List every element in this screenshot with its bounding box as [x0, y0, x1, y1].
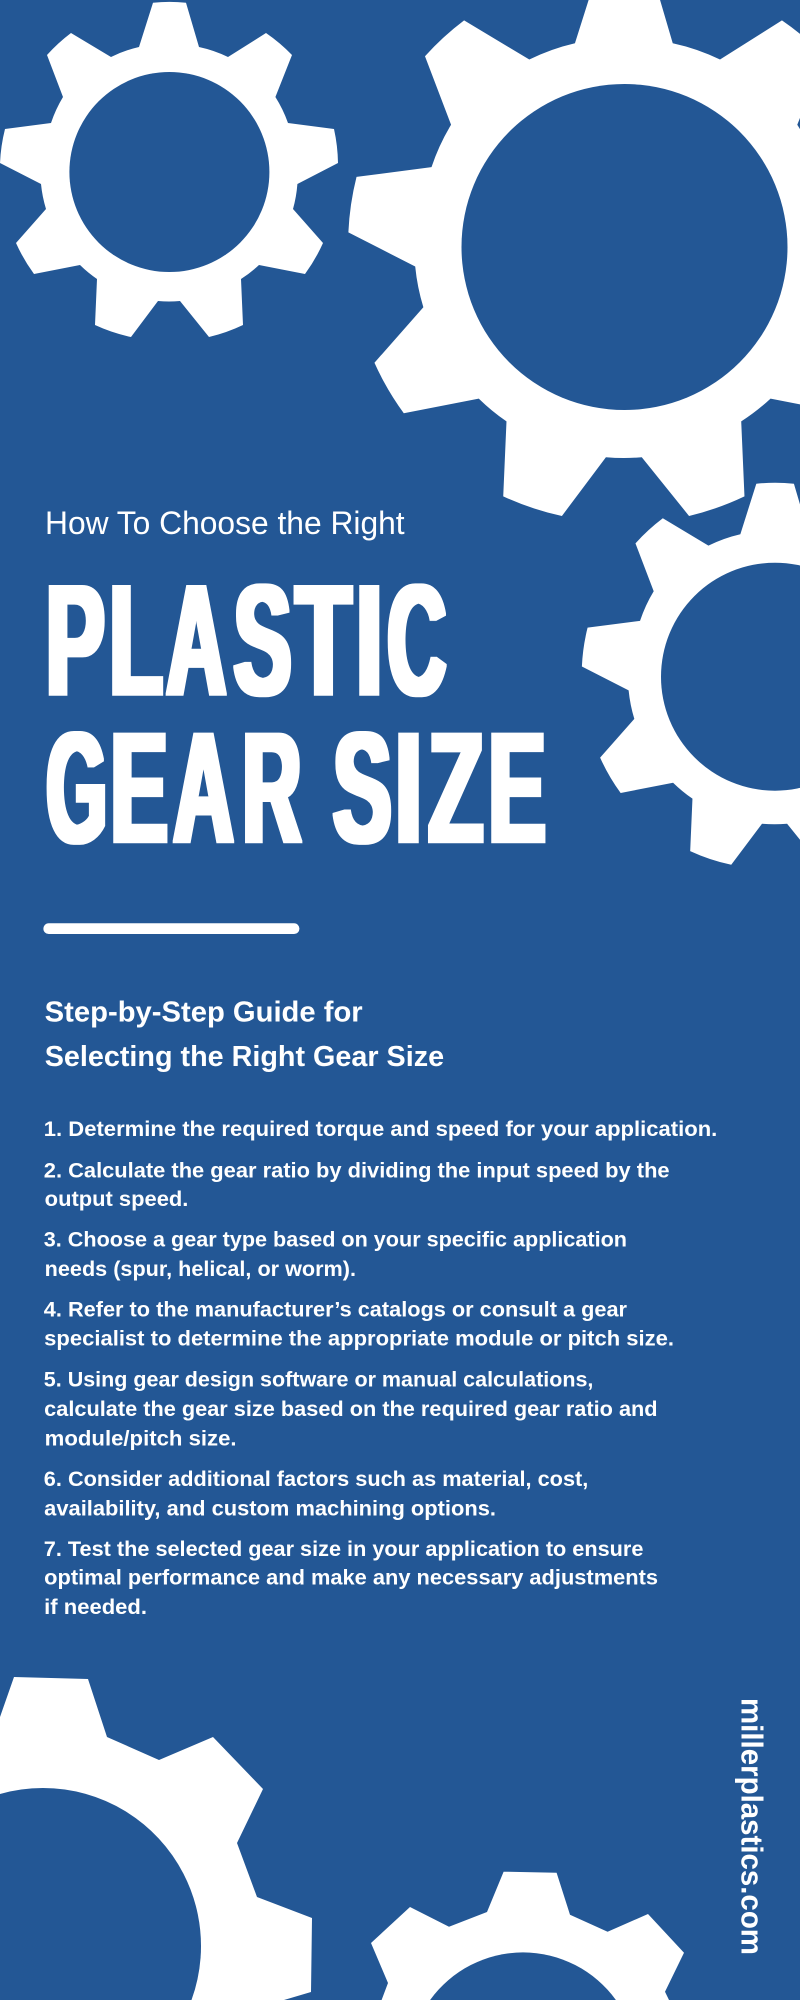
- icon: small gear bottom centre: [371, 1872, 684, 2000]
- step 3: [44, 1229, 627, 1281]
- step 5: [44, 1369, 658, 1450]
- title: PLASTIC GEAR SIZE: C: [387, 553, 446, 729]
- icon: medium gear right edge: [582, 483, 800, 865]
- steps list: [44, 1118, 717, 1619]
- title: PLASTIC GEAR SIZE: T: [296, 553, 351, 729]
- step 7: 7. Test the selected gear size in your application to ensure: [44, 1538, 643, 1561]
- title: PLASTIC GEAR SIZE: P: [46, 553, 105, 729]
- step 6: 6. Consider additional factors such as material, cost,: [44, 1468, 588, 1491]
- title: PLASTIC GEAR SIZE: Z: [428, 700, 483, 876]
- heading: step-by-step guide: Selecting the Right Gear Size: [45, 1041, 444, 1073]
- icon: small gear top left: [0, 2, 338, 337]
- step 3: needs (spur, helical, or worm).: [45, 1258, 356, 1281]
- step 2: [44, 1159, 670, 1211]
- step 5: module/pitch size.: [45, 1427, 237, 1450]
- step 4: 4. Refer to the manufacturer’s catalogs or consult a gear: [44, 1299, 627, 1322]
- step 4: [44, 1299, 674, 1350]
- step 1: 1. Determine the required torque and speed for your application.: [44, 1118, 717, 1141]
- step 4: specialist to determine the appropriate module or pitch size.: [44, 1327, 674, 1350]
- title: PLASTIC GEAR SIZE: A: [174, 700, 234, 876]
- divider bar: [43, 923, 299, 934]
- title: PLASTIC GEAR SIZE: I: [356, 553, 383, 729]
- icon: large gear top right: [348, 0, 800, 516]
- step 3: 3. Choose a gear type based on your specific application: [44, 1229, 627, 1252]
- title: PLASTIC GEAR SIZE: E: [488, 700, 546, 876]
- step 5: 5. Using gear design software or manual calculations,: [44, 1369, 593, 1392]
- step 6: [44, 1468, 588, 1520]
- title: PLASTIC GEAR SIZE: E: [110, 700, 168, 876]
- step 2: output speed.: [45, 1188, 188, 1211]
- step 7: if needed.: [44, 1596, 147, 1619]
- title: PLASTIC GEAR SIZE: G: [46, 700, 107, 876]
- step 7: [44, 1538, 658, 1619]
- step 7: optimal performance and make any necessary adjustments: [44, 1567, 658, 1590]
- title: PLASTIC GEAR SIZE: S: [333, 700, 392, 876]
- heading: step-by-step guide: Step-by-Step Guide for: [45, 997, 363, 1029]
- title: PLASTIC GEAR SIZE: L: [109, 553, 163, 729]
- heading: step-by-step guide: [45, 997, 444, 1073]
- title: PLASTIC GEAR SIZE: R: [243, 700, 301, 876]
- website url vertical: millerplastics.com: [734, 1698, 770, 1955]
- title: PLASTIC GEAR SIZE: I: [394, 700, 422, 876]
- icon: large gear bottom left: [0, 1677, 312, 2000]
- title: PLASTIC GEAR SIZE: A: [166, 553, 226, 729]
- title: PLASTIC GEAR SIZE: S: [234, 553, 292, 729]
- step 6: availability, and custom machining options.: [44, 1497, 496, 1520]
- intro line: How To Choose the Right: How To Choose the Right: [45, 505, 405, 541]
- step 2: 2. Calculate the gear ratio by dividing the input speed by the: [44, 1159, 670, 1182]
- step 5: calculate the gear size based on the required gear ratio and: [44, 1398, 658, 1421]
- title: PLASTIC GEAR SIZE: [46, 553, 546, 876]
